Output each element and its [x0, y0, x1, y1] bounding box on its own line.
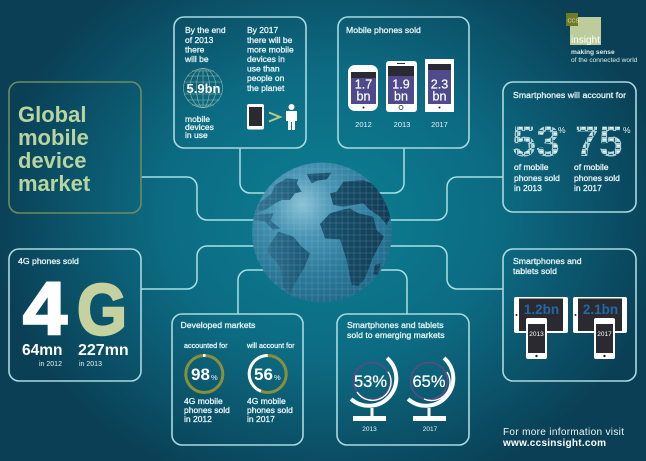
- phone 2013: bn: [394, 90, 408, 104]
- footer: more information: [502, 427, 624, 449]
- stat: 53 percent: [512, 118, 566, 193]
- text: mobile devices in use: devices: [185, 122, 214, 132]
- text: mobile devices in use: in use: [185, 130, 208, 140]
- stat: 56 percent: phones sold: [247, 405, 293, 415]
- big 4G: G: [77, 270, 127, 350]
- caption: in 2012: in 2012: [39, 361, 62, 368]
- phone 2012: 1.7: [355, 78, 372, 92]
- stat: 98 percent: 4G mobile: [184, 396, 223, 406]
- logo: CCS Insight: of the connected world: [571, 57, 638, 64]
- devices 2017: [573, 297, 627, 359]
- devices 2013: [514, 297, 568, 359]
- heading: smartphones and tablets sold: Smartphones and: [513, 256, 582, 266]
- stat: 53 percent: 53: [512, 118, 560, 166]
- stat: 98 percent: accounted for: [184, 341, 228, 350]
- globe stat: 53 percent: 53%: [354, 373, 387, 391]
- stat: 53 percent: of mobile: [514, 162, 549, 172]
- devices 2017: 2.1bn: [583, 302, 618, 317]
- text: by 2017: people on: [247, 73, 285, 83]
- big 4G: 4: [23, 267, 67, 350]
- stat: 56 percent: 56: [254, 365, 273, 384]
- big 4G: [23, 267, 127, 350]
- stat: 75 percent: 75: [575, 118, 623, 166]
- icon: wire globe 5.9bn: 5.9bn: [187, 81, 221, 96]
- globe: [252, 162, 392, 303]
- stat: 75 percent: in 2017: [574, 183, 602, 193]
- phone 2017: 2017: [431, 120, 448, 129]
- stat: 227mn: 227mn: [78, 342, 129, 359]
- text: by the end of 2013: will be: [184, 54, 209, 64]
- text: by 2017: the planet: [247, 83, 285, 93]
- phone 2012: bn: [357, 90, 370, 104]
- text: by 2017: devices in: [247, 54, 285, 64]
- heading: emerging markets: sold to emerging markets: [347, 330, 445, 340]
- text: by the end of 2013: By the end: [185, 25, 226, 35]
- title: mobile: [18, 125, 89, 150]
- heading: developed markets: Developed markets: [180, 320, 256, 330]
- stat: 56 percent: will account for: [246, 341, 295, 350]
- logo: CCS Insight: making sense: [571, 49, 615, 56]
- heading: mobile phones sold: Mobile phones sold: [346, 25, 421, 35]
- stat: 75 percent: phones sold: [574, 173, 620, 183]
- stat: 98 percent: phones sold: [184, 405, 230, 415]
- stat: 98 percent: in 2012: [184, 414, 212, 424]
- stat: 75 percent: [574, 118, 631, 193]
- heading: smartphones and tablets sold: tablets sold: [513, 266, 557, 276]
- heading: 4G phones sold: 4G phones sold: [18, 256, 79, 266]
- phone 2017: bn: [433, 90, 446, 104]
- panel: developed markets: [172, 314, 303, 445]
- stat: 98 percent: %: [211, 373, 218, 382]
- panel: smartphones share: [503, 82, 636, 212]
- globe stat: 65 percent: 65%: [412, 373, 446, 391]
- heading: smartphones will account for: Smartphones will account for: [513, 90, 626, 100]
- phone 2013: [386, 61, 417, 129]
- globe stat: 65 percent: 2017: [423, 426, 438, 433]
- logo: CCS Insight: [566, 13, 638, 64]
- icon: phone greater than person: [247, 104, 297, 130]
- globe stat: 53 percent: 2013: [362, 426, 377, 433]
- text: by the end of 2013: there: [185, 44, 205, 54]
- footer: more information: For more information visit: [503, 427, 624, 438]
- text: by 2017: use than: [247, 64, 280, 74]
- text: by the end of 2013: of 2013: [185, 35, 214, 45]
- title: market: [18, 171, 91, 196]
- phone 2012: [348, 65, 378, 129]
- stat: 56 percent: in 2017: [247, 414, 275, 424]
- stat: 75 percent: of mobile: [574, 162, 609, 172]
- phone 2013: 1.9: [392, 78, 410, 92]
- stat: 53 percent: in 2013: [514, 183, 542, 193]
- stat: 53 percent: %: [558, 125, 566, 135]
- devices 2013: 1.2bn: [524, 302, 559, 317]
- panel: title: [9, 82, 141, 213]
- phone 2013: 2013: [394, 120, 410, 129]
- panel: 4G phones sold: [9, 249, 141, 381]
- caption: in 2013: in 2013: [79, 361, 102, 368]
- stat: 64mn: 64mn: [22, 342, 62, 359]
- text: by 2017: By 2017: [247, 25, 278, 35]
- stat: 53 percent: phones sold: [514, 173, 560, 183]
- text: mobile devices in use: mobile: [185, 114, 210, 124]
- devices 2017: 2017: [597, 331, 612, 338]
- heading: emerging markets: Smartphones and tablets: [347, 320, 444, 330]
- connector lines: [141, 148, 503, 314]
- footer: more information: www.ccsinsight.com: [502, 438, 606, 449]
- devices 2013: 2013: [529, 331, 544, 338]
- logo: CCS Insight: insight: [571, 35, 600, 46]
- title: Global: [18, 102, 86, 127]
- stat: 98 percent: [184, 341, 230, 424]
- text: by 2017: more mobile: [247, 44, 294, 54]
- phone 2017: 2.3: [431, 78, 448, 92]
- stat: 75 percent: %: [623, 125, 631, 135]
- stat: 56 percent: [246, 341, 295, 424]
- phone 2017: [425, 59, 454, 129]
- panel: device forecast: [174, 17, 306, 148]
- globe stat: 65 percent: [408, 358, 453, 433]
- panel: emerging markets: [337, 314, 469, 445]
- stat: 98 percent: 98: [191, 365, 210, 384]
- title: device: [18, 148, 86, 173]
- stat: 56 percent: 4G mobile: [247, 396, 286, 406]
- text: by 2017: there will be: [247, 35, 293, 45]
- panel: mobile phones sold: [338, 17, 469, 148]
- phone 2012: 2012: [355, 120, 372, 129]
- logo: CCS Insight: CCS: [568, 18, 579, 24]
- stat: 56 percent: %: [274, 373, 281, 382]
- globe stat: 53 percent: [351, 358, 396, 433]
- panel: smartphones and tablets sold: [503, 249, 636, 381]
